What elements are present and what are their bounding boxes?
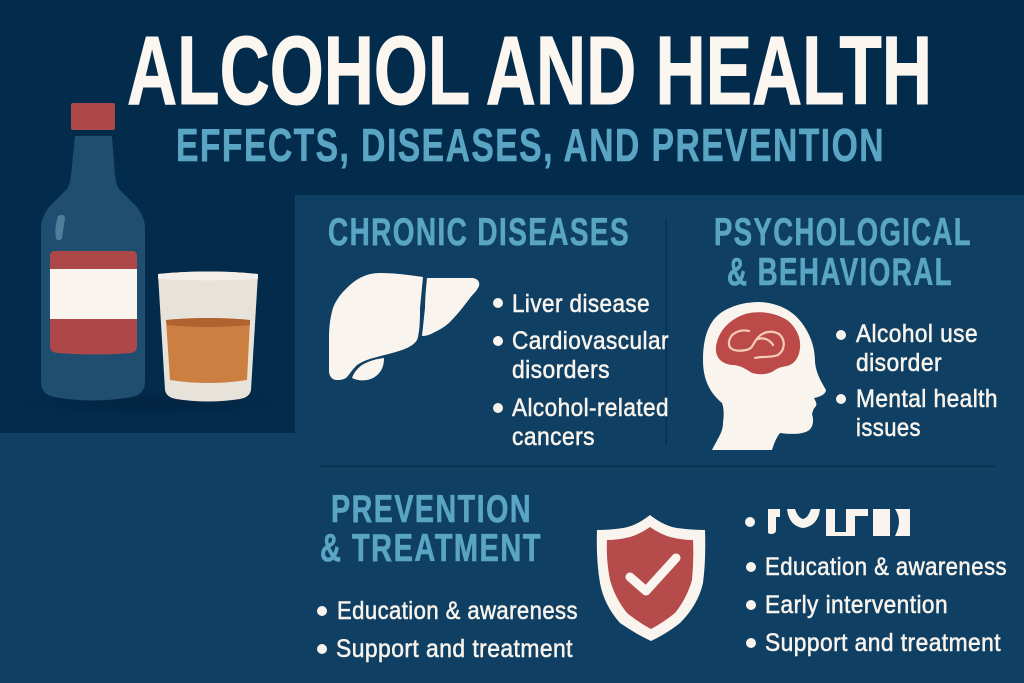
heading: psychological and behavioral xyxy=(714,211,972,294)
list: right prevention items: Early intervention xyxy=(765,591,948,619)
list: right prevention items: Support and treatment xyxy=(765,629,1001,657)
panel: psychological and behavioral xyxy=(703,211,998,450)
heading: prevention and treatment: PREVENTION xyxy=(331,488,532,531)
list: psychological and behavioral: disorder xyxy=(856,349,942,377)
list: psychological and behavioral: issues xyxy=(856,414,921,442)
list: chronic diseases: Cardiovascular xyxy=(512,327,669,355)
panel: chronic diseases xyxy=(328,211,669,451)
panel: prevention and treatment xyxy=(317,488,705,663)
list: prevention and treatment xyxy=(317,597,578,663)
list: psychological and behavioral: Alcohol use xyxy=(856,320,978,348)
icon: head with brain xyxy=(703,302,826,450)
garbled heading shapes xyxy=(745,509,910,536)
list: right prevention items xyxy=(746,553,1007,657)
list: chronic diseases xyxy=(493,290,669,451)
heading: prevention and treatment xyxy=(320,488,542,570)
list: chronic diseases: Alcohol-related xyxy=(512,394,669,422)
list: chronic diseases: disorders xyxy=(512,356,610,384)
panel: right prevention list xyxy=(745,509,1007,657)
list: chronic diseases: cancers xyxy=(512,423,595,451)
icon: shield with check mark xyxy=(597,515,705,641)
heading: prevention and treatment: & TREATMENT xyxy=(320,527,542,570)
list: psychological and behavioral xyxy=(836,320,998,442)
illustration: bottle and glass xyxy=(15,103,285,417)
icon: bottle xyxy=(41,103,145,400)
icon: glass of whisky xyxy=(158,272,258,402)
list: chronic diseases: Liver disease xyxy=(512,290,650,318)
heading: chronic diseases: CHRONIC DISEASES xyxy=(328,211,630,254)
list: psychological and behavioral: Mental health xyxy=(856,385,998,413)
icon: liver xyxy=(329,273,479,380)
list: prevention and treatment: Education & awareness xyxy=(337,597,578,625)
list: prevention and treatment: Support and treatment xyxy=(336,635,573,663)
